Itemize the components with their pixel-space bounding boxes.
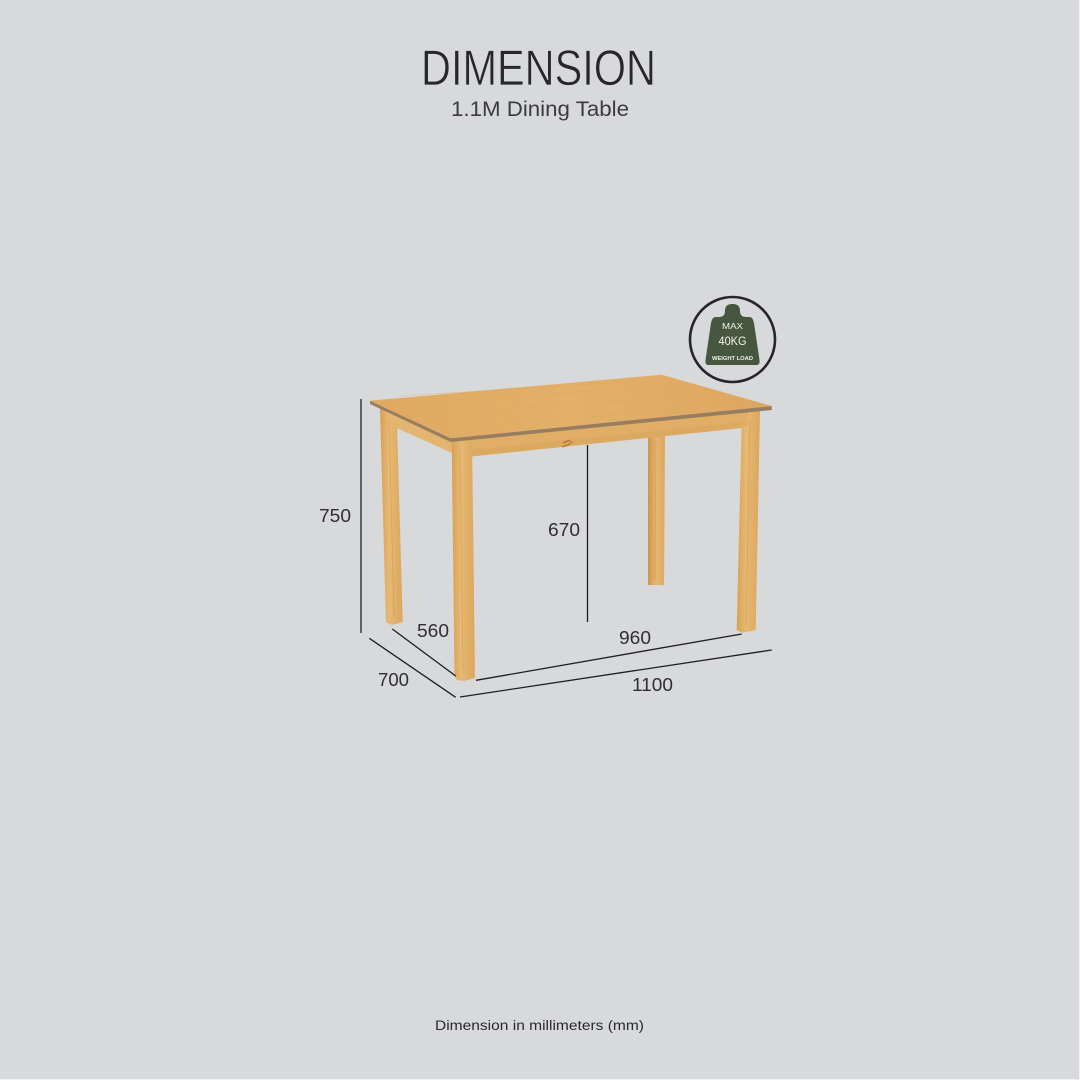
apron knot (562, 440, 572, 447)
label: 1100: 1100 (632, 675, 673, 695)
line: 700 depth (369, 638, 456, 697)
icon: weight (705, 304, 760, 365)
badge text: max: MAX (722, 321, 743, 331)
apron shading (471, 422, 742, 456)
label: 670: 670 (548, 520, 580, 540)
dimension lines (361, 399, 772, 697)
left leg (380, 408, 403, 625)
label: 750: 750 (319, 506, 351, 526)
front apron (471, 411, 748, 456)
weight load badge (690, 297, 775, 382)
dining table (370, 375, 772, 681)
right leg (737, 410, 760, 633)
back leg (648, 434, 665, 585)
wood grain (400, 381, 745, 425)
tabletop (370, 375, 772, 438)
left apron (388, 411, 452, 453)
label: 560: 560 (417, 621, 449, 641)
line: 670 clearance (586, 445, 588, 622)
line: 1100 width (460, 650, 772, 697)
leg grain (389, 420, 750, 670)
table edge (370, 401, 772, 442)
badge text: weight load: WEIGHT LOAD (712, 356, 753, 362)
badge text: 40KG: 40KG (718, 336, 747, 348)
label: 700: 700 (378, 670, 409, 690)
badge ring (690, 297, 775, 382)
title: DIMENSION (421, 40, 656, 96)
line: 960 inner width (476, 634, 742, 680)
footnote: Dimension in millimeters (mm) (435, 1018, 644, 1033)
front leg (452, 440, 475, 681)
label: 960: 960 (619, 628, 651, 648)
line: 560 inner depth (392, 629, 456, 676)
line: 750 height (360, 399, 362, 633)
subtitle: 1.1M Dining Table (451, 98, 629, 121)
